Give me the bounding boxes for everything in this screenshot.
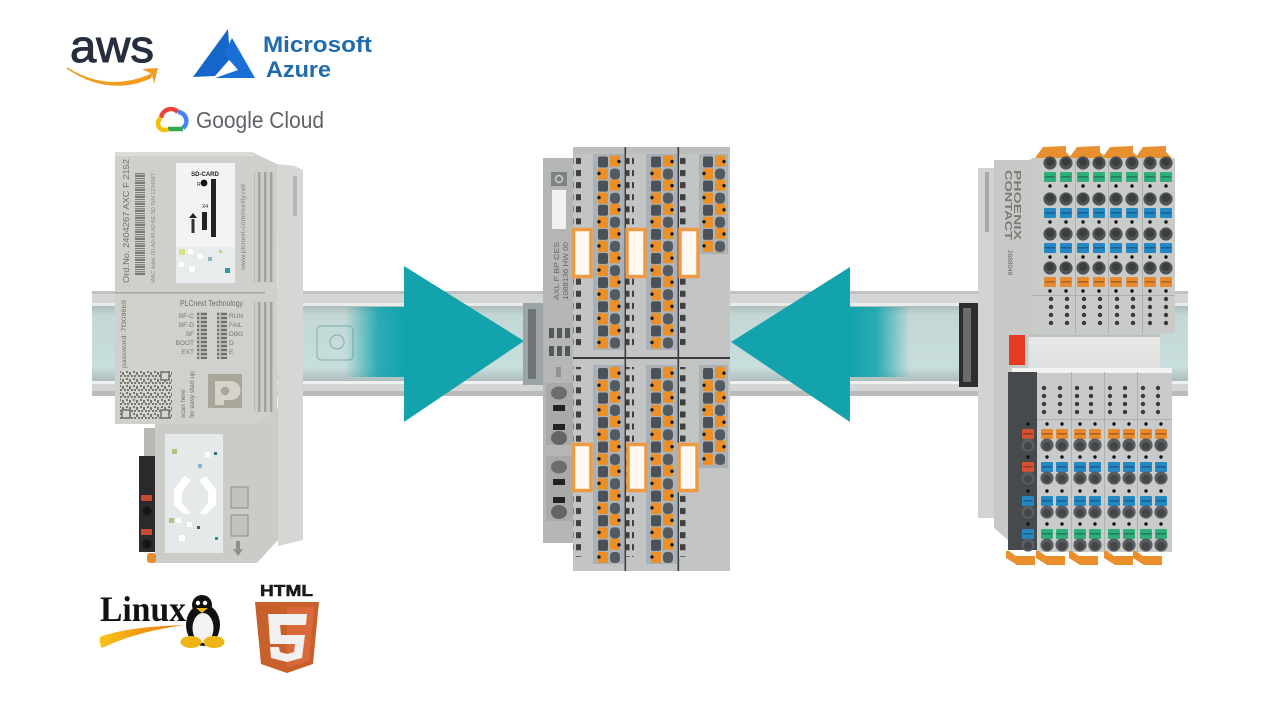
SD-card label: R [197, 182, 201, 188]
orange-framed labels bottom [574, 444, 697, 490]
LED labels right: RUN [229, 313, 243, 320]
logo: HTML5: HTML [260, 583, 313, 600]
white spacer block [1029, 334, 1160, 370]
PLCnext heading: PLCnext Technology [180, 298, 244, 308]
terminals module 1 bottom [597, 367, 621, 563]
controller side housing [277, 164, 303, 546]
device: Axioline Smart Elements [523, 147, 730, 571]
model text: 2688048 [1006, 250, 1013, 276]
logo: Linux: Linux [100, 589, 186, 629]
LED labels right [229, 313, 243, 356]
LED window right [217, 312, 227, 359]
LED labels left: BF-C [179, 313, 194, 320]
LED labels right: D [229, 340, 234, 347]
LED labels left: BOOT [176, 340, 194, 347]
barcode [135, 172, 145, 276]
terminal panel backgrounds [593, 154, 728, 564]
rail section shading [115, 293, 257, 423]
terminals module 1 top [597, 156, 621, 348]
LED window left [197, 312, 207, 359]
top module body [1032, 158, 1175, 333]
community URL text: www.plcnext-community.net [241, 184, 247, 271]
logo: AWS: aws [70, 21, 154, 72]
group separators lower [1036, 372, 1172, 552]
LED labels left: SF [186, 331, 194, 338]
side housing [978, 168, 994, 518]
orange feet [1006, 551, 1162, 565]
black power connector [139, 428, 155, 552]
terminal row lower blue 1 [1021, 455, 1168, 485]
device: Axioline Smart Elements: 1088136 HW 00 [563, 242, 570, 300]
terminal row lower blue 2 [1021, 489, 1168, 519]
terminal row blue 2 [1043, 227, 1173, 259]
lower housing [155, 408, 278, 563]
red block [1009, 335, 1025, 365]
LED labels left: EXT [181, 349, 194, 356]
terminal row lower orange [1021, 422, 1168, 452]
order number text: Ord.No. 2404267 AXC F 2152 [122, 158, 131, 283]
lower-row LED strips [573, 367, 581, 557]
logo: Microsoft Azure: Microsoft [263, 32, 373, 57]
SD-card label: X4 [202, 204, 208, 210]
black backplane connector [959, 303, 978, 387]
terminal row lower green [1021, 522, 1168, 552]
lower module body [1036, 372, 1172, 552]
LED grid upper [1049, 297, 1168, 325]
Phoenix Contact logotype: CONTACT: CONTACT [1002, 170, 1014, 241]
vents lower [254, 302, 274, 412]
terminals module 2 top [650, 156, 674, 348]
QR code [120, 370, 172, 420]
DIN rail [92, 291, 1188, 396]
penguin [180, 595, 224, 648]
orange-framed labels top [574, 230, 698, 276]
vents upper [254, 172, 274, 282]
SD-card label: SD-CARD [191, 172, 219, 178]
LED grid lower [1042, 386, 1160, 414]
logo: Microsoft Azure [193, 29, 373, 82]
vertical password text: password: 7f3086b9 [121, 300, 128, 368]
module housings [573, 147, 730, 571]
LED labels left [176, 313, 194, 356]
group separators upper [1032, 158, 1175, 333]
module dividers [573, 147, 730, 571]
arrow: left to centre [345, 266, 524, 422]
SD-card label [176, 163, 235, 283]
controller main body [115, 152, 277, 424]
MAC address text: MAC Addr. 00:A0:45:A2:6E:3D S/N 1234567 [151, 173, 157, 283]
base label [552, 190, 566, 229]
terminal row blue 1 [1043, 192, 1173, 224]
device: PLCnext controller [115, 152, 303, 563]
main housing [994, 158, 1036, 540]
easy start text: for easy start up [189, 371, 196, 418]
top-row LED strips [573, 155, 581, 350]
terminals module 3 bottom [702, 367, 726, 465]
status LEDs [549, 328, 570, 377]
dark power column [1008, 372, 1037, 550]
down arrow [233, 541, 243, 556]
rail embossed logo [317, 326, 353, 360]
lower white panel [165, 434, 223, 553]
terminals module 3 top [702, 156, 726, 252]
terminals module 2 bottom [650, 367, 674, 563]
easy start text [180, 371, 196, 418]
Phoenix Contact logotype: PHOENIX: PHOENIX [1011, 170, 1023, 240]
base vertical text: AXL F BP CES [552, 242, 561, 300]
Ethernet ports [231, 487, 248, 536]
base coupler [543, 158, 574, 543]
LED labels right: FAIL [229, 322, 243, 329]
terminal row orange [1043, 261, 1173, 293]
LED labels right: E [229, 349, 234, 356]
orange foot [147, 553, 156, 563]
logo: HTML5 [255, 583, 319, 673]
device: Axioline Smart Elements I/O [959, 146, 1175, 565]
logo: Microsoft Azure: Azure [266, 57, 331, 82]
rail connector [523, 303, 544, 385]
LED labels left: BF-D [179, 322, 194, 329]
Ethernet blocks [546, 383, 574, 521]
terminal row green [1043, 156, 1173, 188]
logo: Google Cloud: Google Cloud [196, 107, 324, 133]
Phoenix Contact logo badge [208, 374, 242, 408]
easy start text: scan here [180, 389, 187, 418]
arrow: right to centre [731, 267, 910, 422]
vents bottom [256, 428, 276, 540]
top levers [1035, 146, 1172, 158]
LED labels right: DBG [229, 331, 243, 338]
logo: Linux [100, 589, 224, 648]
